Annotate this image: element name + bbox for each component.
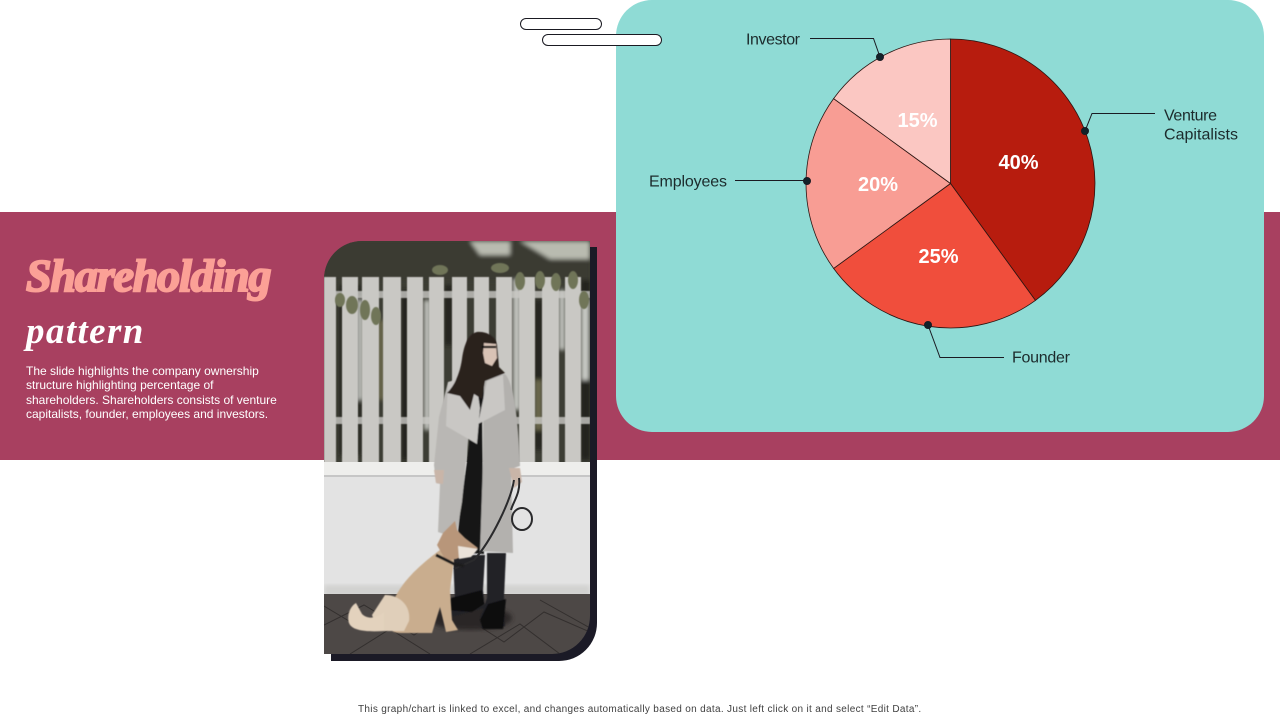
slice: Venture Capitalists 40% bbox=[950, 39, 1095, 300]
photo card shadow bbox=[331, 247, 597, 661]
value labels: 20% bbox=[858, 174, 898, 196]
slice: Employees 20% bbox=[806, 99, 950, 268]
category labels: Venture bbox=[1164, 108, 1217, 124]
teal chart panel bbox=[616, 0, 1264, 432]
slice: Founder 25% bbox=[834, 184, 1035, 328]
category labels bbox=[649, 32, 1238, 366]
leader: Venture Capitalists bbox=[1082, 114, 1155, 134]
description text: structure highlighting percentage of bbox=[26, 378, 213, 392]
title: pattern: pattern bbox=[26, 311, 145, 352]
value labels: 40% bbox=[998, 152, 1039, 174]
leash bbox=[454, 478, 532, 569]
wall bbox=[324, 477, 590, 594]
footnote: This graph/chart is linked to excel, and changes automatically based on data. Just left click on it and select “Edit Data”. bbox=[358, 704, 922, 715]
category labels: Employees bbox=[649, 174, 727, 190]
value labels: 25% bbox=[918, 246, 959, 268]
title: Shareholding: Shareholding bbox=[26, 250, 270, 301]
leader: Employees bbox=[735, 178, 810, 184]
description text bbox=[26, 364, 277, 421]
category labels: Capitalists bbox=[1164, 126, 1238, 144]
leaves bbox=[335, 263, 589, 325]
slice: Investor 15% bbox=[834, 39, 950, 184]
description text: The slide highlights the company ownership bbox=[26, 364, 259, 378]
value labels bbox=[858, 110, 1039, 268]
background band bbox=[0, 212, 1280, 460]
description text: capitalists, founder, employees and investors. bbox=[26, 407, 268, 421]
decorative pill top bbox=[520, 18, 602, 30]
decorative pill bottom bbox=[542, 34, 662, 46]
pie chart with leader labels bbox=[649, 32, 1238, 366]
value labels: 15% bbox=[897, 110, 938, 132]
description text: shareholders. Shareholders consists of venture bbox=[26, 393, 277, 407]
leader: Investor bbox=[810, 38, 884, 60]
dog bbox=[348, 521, 478, 633]
fence pickets bbox=[324, 277, 590, 463]
woman bbox=[434, 332, 522, 629]
pavement bbox=[324, 594, 590, 654]
category labels: Investor bbox=[746, 32, 801, 48]
leader: Founder bbox=[924, 322, 1004, 358]
category labels: Founder bbox=[1012, 350, 1071, 366]
photo: woman with dog by a white fence bbox=[324, 241, 590, 654]
